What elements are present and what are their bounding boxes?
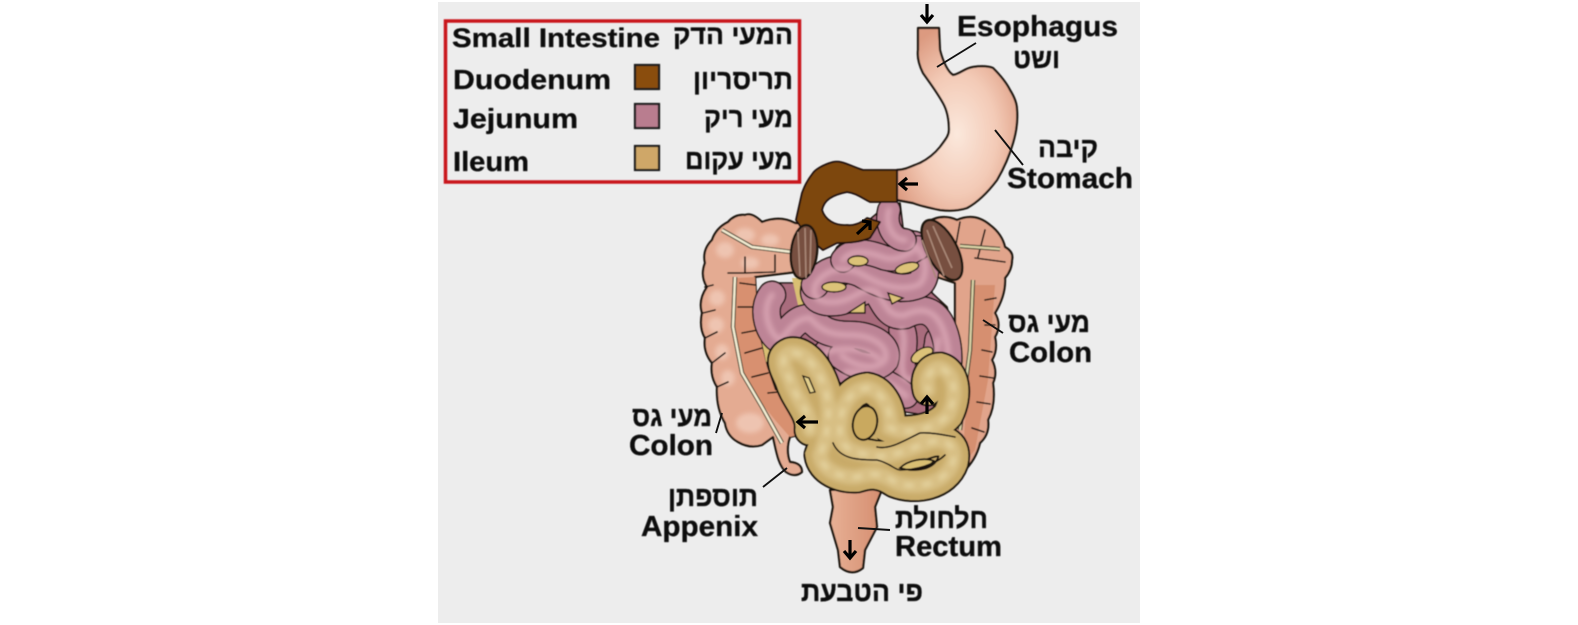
descending and transverse colon, right (923, 217, 1012, 472)
jejunum loops (767, 210, 948, 396)
small intestine backing (758, 203, 957, 415)
label: stomach: קיבה (1038, 132, 1098, 163)
label: rectum: חלחולת (895, 503, 988, 534)
arrow: into esophagus (921, 4, 933, 22)
legend title hebrew: המעי הדק (673, 20, 793, 50)
label: esophagus: Esophagus (957, 11, 1118, 43)
colon (701, 214, 1012, 475)
ileum inner openings (850, 404, 880, 442)
label: esophagus (957, 11, 1118, 74)
label: colon left: Colon (629, 430, 713, 462)
legend row jejunum: Jejunum (453, 103, 578, 134)
arrow: duodenum to jejunum (857, 221, 870, 234)
legend box (446, 20, 800, 182)
label: stomach (1007, 132, 1133, 195)
legend row jejunum (453, 102, 793, 134)
background panel (438, 2, 1140, 623)
arrows (798, 4, 933, 558)
legend row duodenum: Duodenum (453, 64, 611, 95)
rectum (830, 487, 883, 572)
legend title english: Small Intestine (452, 23, 660, 53)
stomach (897, 28, 1017, 211)
label: esophagus: ושט (1013, 43, 1060, 74)
label: anus: פי הטבעת (801, 576, 923, 607)
label: rectum (895, 503, 1002, 563)
label: rectum: Rectum (895, 531, 1002, 563)
label: appendix: תוספתן (668, 481, 758, 512)
legend row duodenum: תריסריון (693, 64, 793, 95)
label: colon right (1008, 307, 1092, 369)
yellow fat between loops (822, 256, 935, 366)
illustration (701, 28, 1017, 572)
legend row duodenum (453, 64, 793, 95)
ileum loops (783, 353, 955, 486)
label: stomach: Stomach (1007, 163, 1133, 195)
label: appendix (641, 481, 758, 543)
label: appendix: Appenix (641, 511, 758, 543)
leader lines (716, 43, 1023, 530)
arrow: stomach to duodenum (900, 178, 918, 190)
arrow: rectum exit (844, 540, 856, 558)
ascending and transverse colon, left (701, 214, 812, 475)
label: colon right: מעי גס (1008, 307, 1090, 338)
label: colon right: Colon (1009, 337, 1092, 369)
text labels and legend (446, 11, 1133, 607)
label: colon left (629, 401, 713, 462)
legend row ileum: Ileum (453, 146, 529, 177)
legend row ileum: מעי עקום (685, 144, 793, 175)
label: colon left: מעי גס (632, 401, 712, 432)
duodenum (796, 162, 897, 250)
yellow fat beside loops (762, 278, 812, 362)
legend row jejunum: מעי ריק (704, 102, 793, 133)
legend row ileum (453, 144, 793, 177)
arrow: ileum to colon (798, 416, 818, 428)
arrow: jejunum to ileum (921, 397, 933, 414)
colon end caps (788, 214, 971, 286)
